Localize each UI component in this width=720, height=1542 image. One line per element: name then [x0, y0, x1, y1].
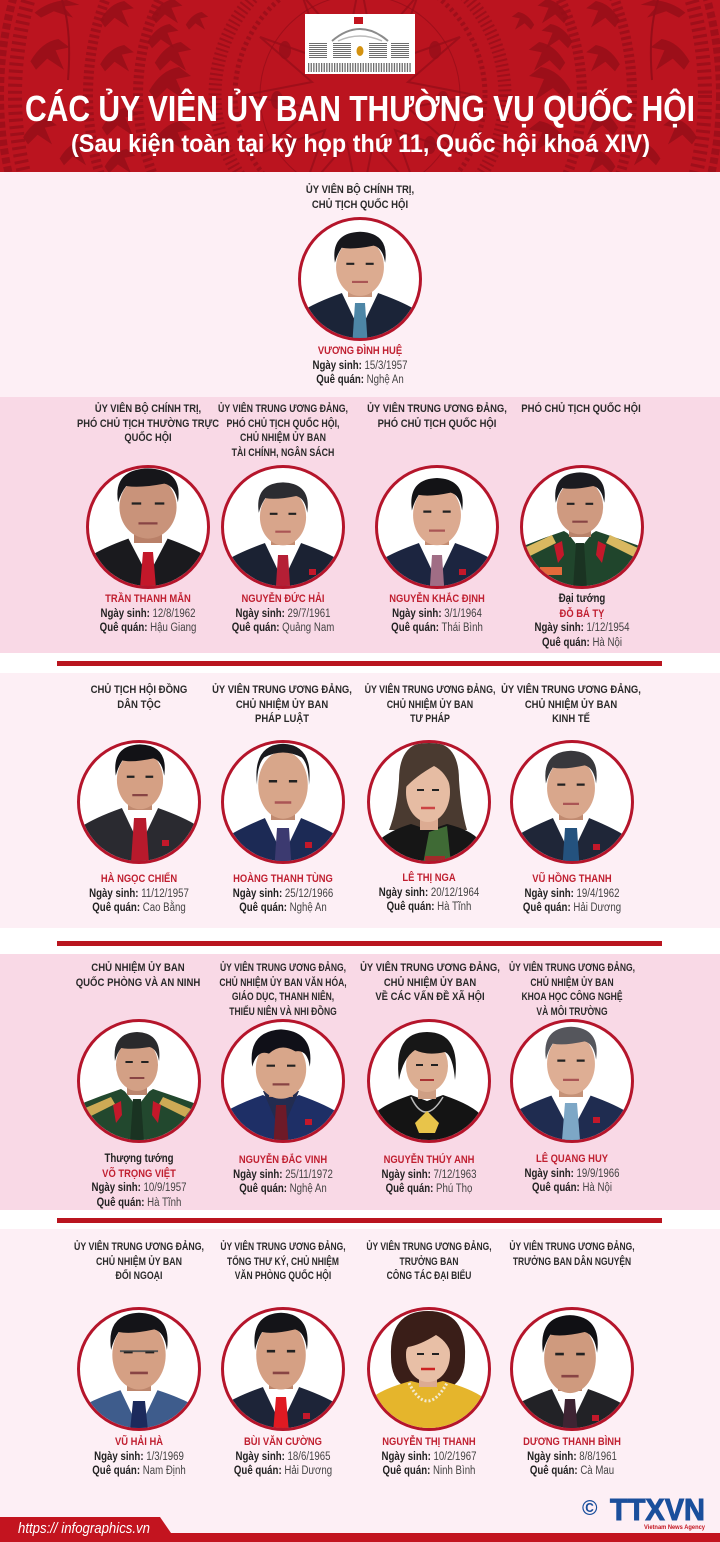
name and details: Quê quán: Hà Tĩnh	[97, 1197, 181, 1209]
role: VỀ CÁC VẤN ĐỀ XÃ HỘI	[375, 991, 485, 1003]
section background: committee heads 2	[0, 954, 720, 1210]
member: Nguyễn Đức Hải	[218, 402, 348, 634]
portrait	[221, 1307, 345, 1431]
name and details: Quê quán: Nghệ An	[316, 374, 404, 386]
role: THIẾU NIÊN VÀ NHI ĐỒNG	[229, 1006, 337, 1018]
name and details: Quê quán: Nghệ An	[239, 902, 327, 914]
role	[77, 402, 219, 444]
footer: copyright and agency logo: ©	[582, 1497, 598, 1520]
member: Nguyễn Đắc Vinh	[219, 961, 347, 1195]
name and details: Quê quán: Hà Nội	[542, 637, 622, 649]
name and details: Ngày sinh: 15/3/1957	[312, 360, 408, 372]
portrait	[367, 1307, 491, 1431]
name and details: Ngày sinh: 8/8/1961	[527, 1451, 617, 1463]
footer: red bar and website tab	[0, 1516, 720, 1542]
name and details: Ngày sinh: 12/8/1962	[100, 608, 196, 620]
role: ỦY VIÊN TRUNG ƯƠNG ĐẢNG,	[218, 403, 348, 415]
role: GIÁO DỤC, THANH NIÊN,	[232, 991, 334, 1003]
role: PHÓ CHỦ TỊCH QUỐC HỘI	[521, 403, 641, 415]
portrait	[510, 740, 634, 864]
role: CÔNG TÁC ĐẠI BIỂU	[387, 1270, 471, 1282]
role: ỦY VIÊN TRUNG ƯƠNG ĐẢNG,	[220, 962, 346, 974]
portrait	[510, 1019, 634, 1143]
name and details: Ngày sinh: 10/9/1957	[91, 1182, 187, 1194]
role: TỔNG THƯ KÝ, CHỦ NHIỆM	[227, 1256, 339, 1268]
role: TRƯỞNG BAN	[400, 1256, 458, 1268]
portrait	[77, 1019, 201, 1143]
member: Vương Đình Huệ	[298, 183, 422, 386]
role	[365, 683, 495, 725]
portrait	[77, 1307, 201, 1431]
name and details	[389, 592, 485, 634]
portrait	[221, 465, 345, 589]
name and details: HOÀNG THANH TÙNG	[233, 873, 333, 885]
role: CHỦ NHIỆM ỦY BAN	[384, 977, 476, 989]
name and details: LÊ THỊ NGA	[402, 872, 456, 884]
role	[219, 961, 347, 1018]
name and details: Quê quán: Thái Bình	[391, 622, 483, 634]
portrait	[367, 740, 491, 864]
section background: chairman	[0, 172, 720, 397]
portrait	[77, 740, 201, 864]
member: Vũ Hải Hà	[64, 1240, 214, 1473]
name and details: Ngày sinh: 1/3/1969	[94, 1451, 184, 1463]
role	[367, 402, 507, 430]
footer: copyright and agency logo	[578, 1494, 718, 1534]
role: KINH TẾ	[552, 713, 590, 725]
name and details	[480, 1435, 664, 1479]
role: CHỦ TỊCH HỘI ĐỒNG	[91, 684, 187, 696]
name and details: Quê quán: Hậu Giang	[100, 622, 196, 634]
role: ỦY VIÊN BỘ CHÍNH TRỊ,	[306, 184, 414, 196]
name and details: NGUYỄN ĐỨC HẢI	[241, 593, 324, 605]
role: CHỦ NHIỆM ỦY BAN	[240, 432, 326, 444]
name and details: VŨ HỒNG THANH	[532, 873, 612, 885]
role	[198, 1240, 368, 1284]
name and details	[233, 1153, 333, 1195]
role	[501, 683, 641, 725]
portrait	[298, 217, 422, 341]
member: Nguyễn Thị Thanh	[354, 1240, 504, 1473]
name and details: Quê quán: Hà Tĩnh	[387, 901, 471, 913]
name and details: TRẦN THANH MẪN	[105, 593, 191, 605]
role: CHỦ NHIỆM ỦY BAN VĂN HÓA,	[219, 977, 347, 989]
name and details	[91, 1153, 187, 1209]
role	[509, 961, 635, 1018]
icon: National Assembly building logo	[305, 14, 415, 74]
name and details: DƯƠNG THANH BÌNH	[523, 1436, 621, 1448]
role: PHÁP LUẬT	[255, 713, 309, 725]
role: CHỦ NHIỆM ỦY BAN	[236, 699, 328, 711]
role	[91, 683, 187, 711]
role: CHỦ NHIỆM ỦY BAN	[96, 1256, 182, 1268]
member: Lê Thị Nga	[365, 683, 495, 913]
role	[360, 961, 500, 1003]
role	[344, 1240, 514, 1284]
name and details: Ngày sinh: 18/6/1965	[235, 1451, 331, 1463]
member: Trần Thanh Mẫn	[77, 402, 219, 634]
name and details	[233, 872, 333, 914]
name and details: LÊ QUANG HUY	[536, 1153, 608, 1165]
title	[25, 87, 695, 158]
name and details: VƯƠNG ĐÌNH HUỆ	[318, 345, 402, 357]
role: ỦY VIÊN TRUNG ƯƠNG ĐẢNG,	[367, 403, 507, 415]
name and details	[381, 1153, 477, 1195]
name and details: ĐỖ BÁ TỴ	[560, 608, 604, 620]
name and details: Quê quán: Hà Nội	[532, 1182, 612, 1194]
role: CHỦ NHIỆM ỦY BAN	[91, 962, 185, 974]
footer: red bar and website tab: https:// infographics.vn	[18, 1520, 150, 1537]
role: QUỐC PHÒNG VÀ AN NINH	[76, 977, 200, 989]
name and details: Quê quán: Quảng Nam	[232, 622, 334, 634]
role: TRƯỞNG BAN DÂN NGUYỆN	[513, 1256, 631, 1268]
role: VĂN PHÒNG QUỐC HỘI	[235, 1270, 331, 1282]
member: Đỗ Bá Tỵ	[520, 402, 644, 649]
name and details: Ngày sinh: 1/12/1954	[534, 622, 630, 634]
name and details: Ngày sinh: 29/7/1961	[235, 608, 331, 620]
name and details	[480, 1152, 664, 1196]
section background: vice chairs	[0, 397, 720, 653]
name and details: VŨ HẢI HÀ	[115, 1436, 163, 1448]
name and details: Ngày sinh: 7/12/1963	[381, 1169, 477, 1181]
name and details: Quê quán: Nam Định	[92, 1465, 186, 1477]
role: ỦY VIÊN TRUNG ƯƠNG ĐẢNG,	[501, 684, 641, 696]
name and details: NGUYỄN THỊ THANH	[382, 1436, 476, 1448]
portrait	[520, 465, 644, 589]
member: Hà Ngọc Chiến	[77, 683, 201, 914]
name and details	[312, 344, 408, 386]
role: KHOA HỌC CÔNG NGHỆ	[521, 991, 623, 1003]
role	[51, 1240, 227, 1284]
name and details	[337, 1435, 521, 1479]
member: Nguyễn Khắc Định	[367, 402, 507, 634]
role: PHÓ CHỦ TỊCH QUỐC HỘI,	[227, 418, 339, 430]
portrait	[367, 1019, 491, 1143]
name and details: HÀ NGỌC CHIẾN	[101, 873, 177, 885]
role: ỦY VIÊN TRUNG ƯƠNG ĐẢNG,	[220, 1241, 346, 1253]
title: (Sau kiện toàn tại kỳ họp thứ 11, Quốc hội khoá XIV)	[71, 130, 650, 158]
name and details: Quê quán: Phú Thọ	[386, 1183, 472, 1195]
role: TÀI CHÍNH, NGÂN SÁCH	[232, 447, 334, 459]
name and details: Thượng tướng	[104, 1153, 174, 1165]
name and details: Quê quán: Cao Bằng	[92, 902, 186, 914]
name and details: Ngày sinh: 19/4/1962	[524, 888, 620, 900]
header banner	[0, 0, 720, 172]
name and details: Quê quán: Cà Mau	[530, 1465, 614, 1477]
name and details: Ngày sinh: 11/12/1957	[89, 888, 189, 900]
role	[306, 183, 414, 211]
name and details: NGUYỄN KHẮC ĐỊNH	[389, 593, 485, 605]
name and details	[89, 872, 189, 914]
portrait	[375, 465, 499, 589]
role: ỦY VIÊN TRUNG ƯƠNG ĐẢNG,	[366, 1241, 492, 1253]
member: Võ Trọng Việt	[76, 961, 201, 1209]
role: CHỦ TỊCH QUỐC HỘI	[312, 199, 408, 211]
member: Hoàng Thanh Tùng	[212, 683, 352, 914]
role: ĐỐI NGOẠI	[116, 1270, 162, 1282]
name and details: Ngày sinh: 25/11/1972	[233, 1169, 333, 1181]
name and details	[523, 872, 621, 914]
role: ỦY VIÊN TRUNG ƯƠNG ĐẢNG,	[365, 684, 495, 696]
name and details	[232, 592, 334, 634]
role: ỦY VIÊN TRUNG ƯƠNG ĐẢNG,	[212, 684, 352, 696]
role: TƯ PHÁP	[410, 713, 450, 725]
role: ỦY VIÊN TRUNG ƯƠNG ĐẢNG,	[74, 1241, 204, 1253]
member: Lê Quang Huy	[509, 961, 635, 1194]
section background: committee heads 3	[0, 1229, 720, 1533]
role	[212, 683, 352, 725]
footer: copyright and agency logo: Vietnam News Agency	[644, 1525, 706, 1531]
member: Bùi Văn Cường	[208, 1240, 358, 1473]
name and details: Quê quán: Hải Dương	[523, 902, 621, 914]
role: ỦY VIÊN BỘ CHÍNH TRỊ,	[95, 403, 201, 415]
role: ỦY VIÊN TRUNG ƯƠNG ĐẢNG,	[509, 1241, 635, 1253]
role	[76, 961, 200, 989]
portrait	[510, 1307, 634, 1431]
role: PHÓ CHỦ TỊCH QUỐC HỘI	[378, 418, 496, 430]
name and details	[191, 1435, 375, 1479]
header drum pattern	[0, 0, 720, 172]
role: ỦY VIÊN TRUNG ƯƠNG ĐẢNG,	[509, 962, 635, 974]
name and details: VÕ TRỌNG VIỆT	[102, 1168, 176, 1180]
name and details: Đại tướng	[559, 593, 605, 605]
name and details: Ngày sinh: 10/2/1967	[381, 1451, 477, 1463]
section background: committee heads 1	[0, 673, 720, 928]
name and details: Quê quán: Hải Dương	[234, 1465, 332, 1477]
name and details: Ngày sinh: 19/9/1966	[524, 1168, 620, 1180]
role: CHỦ NHIỆM ỦY BAN	[530, 977, 614, 989]
role: QUỐC HỘI	[124, 432, 172, 444]
name and details: NGUYỄN ĐẮC VINH	[239, 1154, 327, 1166]
name and details: Quê quán: Ninh Bình	[383, 1465, 475, 1477]
portrait	[86, 465, 210, 589]
name and details: NGUYỄN THÚY ANH	[384, 1154, 474, 1166]
role: VÀ MÔI TRƯỜNG	[536, 1006, 608, 1018]
role: CHỦ NHIỆM ỦY BAN	[387, 699, 473, 711]
role	[487, 1240, 657, 1269]
name and details	[379, 871, 479, 913]
role	[218, 402, 348, 459]
name and details	[100, 592, 196, 634]
name and details: Quê quán: Nghệ An	[239, 1183, 327, 1195]
role: ỦY VIÊN TRUNG ƯƠNG ĐẢNG,	[360, 962, 500, 974]
name and details	[47, 1435, 231, 1479]
role: CHỦ NHIỆM ỦY BAN	[525, 699, 617, 711]
member: Nguyễn Thúy Anh	[360, 961, 500, 1195]
member: Vũ Hồng Thanh	[501, 683, 641, 914]
portrait	[221, 1019, 345, 1143]
name and details: BÙI VĂN CƯỜNG	[244, 1436, 322, 1448]
member: Dương Thanh Bình	[497, 1240, 647, 1473]
portrait	[221, 740, 345, 864]
role: DÂN TỘC	[117, 699, 161, 711]
name and details: Ngày sinh: 25/12/1966	[233, 888, 333, 900]
name and details: Ngày sinh: 20/12/1964	[379, 887, 479, 899]
name and details	[534, 593, 630, 649]
role: PHÓ CHỦ TỊCH THƯỜNG TRỰC	[77, 418, 219, 430]
name and details: Ngày sinh: 3/1/1964	[392, 608, 482, 620]
